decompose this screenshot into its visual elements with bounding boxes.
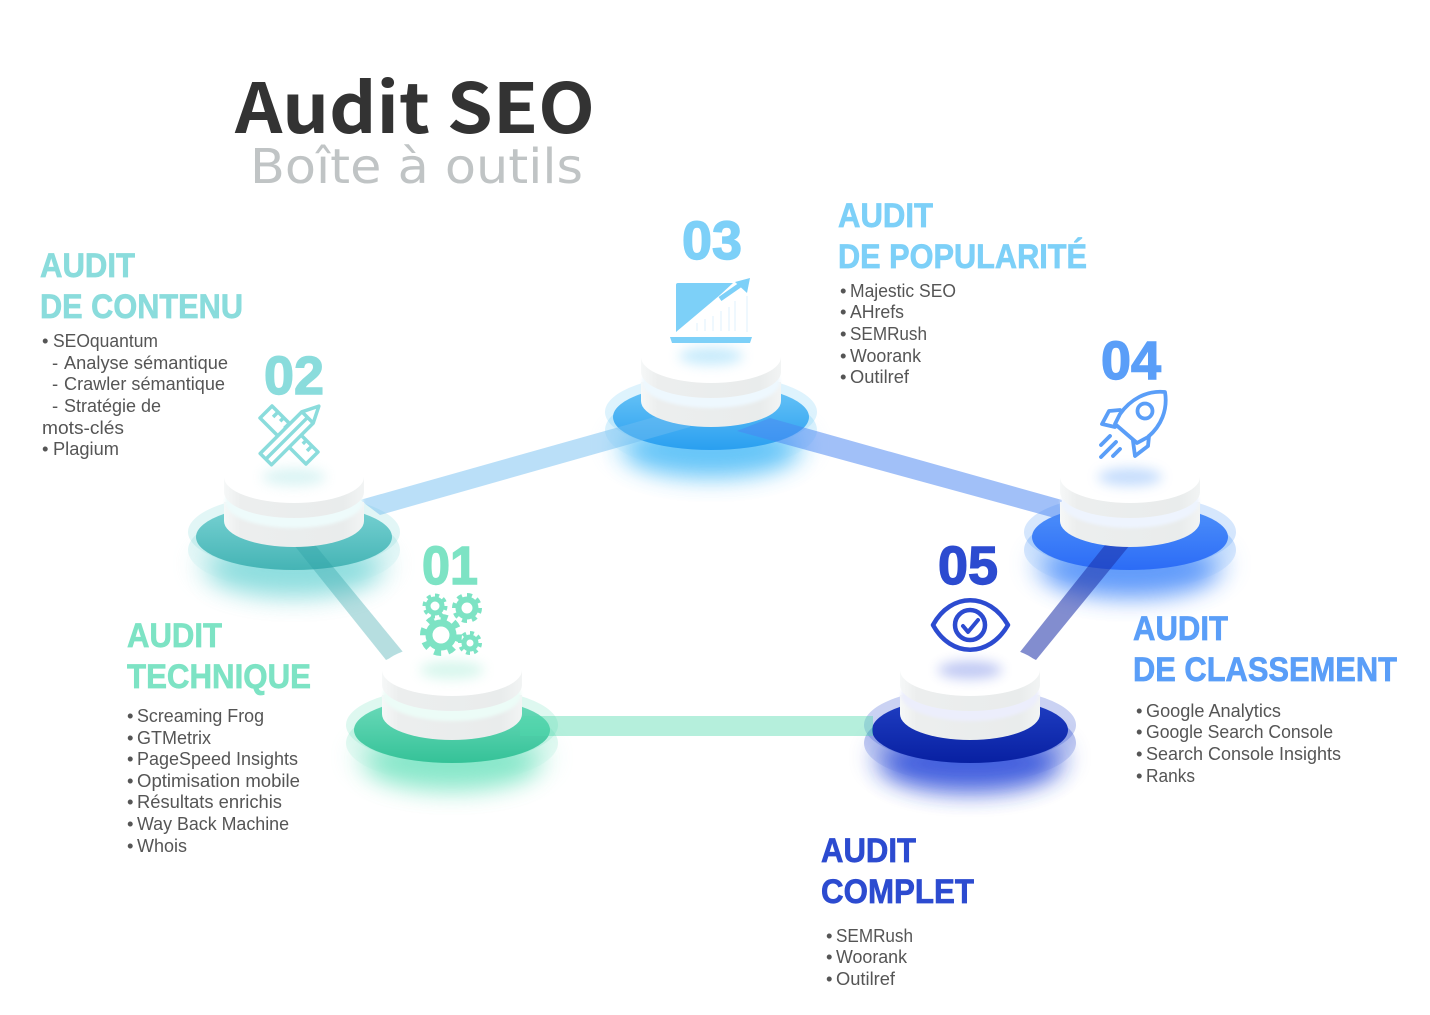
list: audit de classement: •: [1136, 700, 1142, 721]
list: audit complet: •: [826, 925, 832, 946]
list: audit technique: •: [127, 748, 133, 769]
list: audit complet: Outilref: [836, 968, 896, 989]
list: audit technique: Way Back Machine: [137, 813, 289, 834]
platform: node 04: [1060, 451, 1200, 547]
base: node 05: [864, 687, 1076, 791]
platform: node 03: [641, 331, 781, 427]
heading: audit de contenu: [40, 247, 243, 326]
list: audit technique: •: [127, 727, 133, 748]
platform: node 01: [382, 644, 522, 740]
number 03: 03: [682, 211, 742, 271]
subtitle: Boîte à outils: [250, 139, 583, 195]
heading: audit complet: COMPLET: [821, 873, 974, 911]
platform: node 05: [900, 644, 1040, 740]
list: audit technique: •: [127, 791, 133, 812]
base: node 04: [1024, 494, 1236, 598]
list: audit technique: [127, 705, 300, 856]
connector: 02 to 01: [290, 540, 403, 660]
heading: audit de classement: DE CLASSEMENT: [1133, 651, 1397, 689]
icon: laptop chart: [670, 278, 752, 343]
list: audit de contenu: •: [42, 330, 48, 351]
list: audit de popularité: •: [840, 301, 846, 322]
list: audit technique: •: [127, 835, 133, 856]
list: audit de contenu: •: [42, 438, 48, 459]
list: audit de popularité: •: [840, 366, 846, 387]
list: audit de contenu: -: [52, 395, 58, 416]
list: audit de contenu: SEOquantum: [53, 330, 158, 351]
list: audit de popularité: •: [840, 280, 846, 301]
list: audit de contenu: mots-clés: [42, 417, 124, 438]
platform: node 02: [224, 451, 364, 547]
heading: audit de classement: [1133, 610, 1397, 689]
number 05: 05: [938, 536, 998, 596]
list: audit de contenu: -: [52, 373, 58, 394]
list: audit de contenu: Crawler sémantique: [64, 373, 225, 394]
icon: gears: [423, 595, 480, 653]
icon: rocket: [1101, 392, 1166, 457]
heading: audit de classement: AUDIT: [1133, 610, 1228, 648]
list: audit complet: Woorank: [836, 946, 908, 967]
list: audit de popularité: AHrefs: [850, 301, 904, 322]
list: audit de contenu: -: [52, 352, 58, 373]
list: audit de classement: Ranks: [1146, 765, 1195, 786]
list: audit technique: •: [127, 705, 133, 726]
list: audit complet: [826, 925, 913, 989]
connector: 03 to 04: [737, 418, 1062, 520]
list: audit de classement: [1136, 700, 1341, 786]
list: audit de classement: Google Analytics: [1146, 700, 1281, 721]
list: audit de popularité: [840, 280, 956, 387]
list: audit de classement: Search Console Insights: [1146, 743, 1341, 764]
list: audit technique: •: [127, 813, 133, 834]
icon: eye: [933, 600, 1008, 650]
list: audit technique: Screaming Frog: [137, 705, 264, 726]
number 04: 04: [1101, 331, 1161, 391]
list: audit de popularité: •: [840, 323, 846, 344]
panel: audit de contenu: [40, 247, 243, 459]
heading: audit de popularité: DE POPULARITÉ: [838, 238, 1087, 276]
list: audit technique: GTMetrix: [137, 727, 212, 748]
list: audit complet: SEMRush: [836, 925, 913, 946]
heading: audit de contenu: AUDIT: [40, 247, 135, 285]
list: audit de classement: •: [1136, 721, 1142, 742]
list: audit technique: Optimisation mobile: [137, 770, 300, 791]
list: audit de popularité: Woorank: [850, 345, 922, 366]
list: audit complet: •: [826, 968, 832, 989]
heading: audit technique: [127, 617, 311, 696]
list: audit de classement: Google Search Console: [1146, 721, 1333, 742]
panel: audit de popularité: [838, 197, 1087, 387]
list: audit de classement: •: [1136, 765, 1142, 786]
connector: 01 to 05: [520, 716, 873, 736]
panel: audit de classement: [1133, 610, 1397, 786]
base: node 02: [188, 494, 400, 598]
heading: audit de popularité: [838, 197, 1087, 276]
heading: audit de contenu: DE CONTENU: [40, 288, 243, 326]
number 01: 01: [422, 536, 478, 596]
base: node 03: [605, 374, 817, 478]
base: node 01: [346, 687, 558, 791]
list: audit de popularité: •: [840, 345, 846, 366]
heading: audit technique: TECHNIQUE: [127, 658, 311, 696]
panel: audit technique: [127, 617, 311, 856]
list: audit technique: Whois: [137, 835, 187, 856]
panel: audit complet: [821, 832, 974, 989]
connector: 04 to 05: [1020, 540, 1134, 660]
heading: audit complet: [821, 832, 974, 911]
list: audit de contenu: Stratégie de: [64, 395, 161, 416]
number 02: 02: [264, 346, 324, 406]
list: audit technique: •: [127, 770, 133, 791]
list: audit technique: PageSpeed Insights: [137, 748, 298, 769]
list: audit de popularité: SEMRush: [850, 323, 927, 344]
heading: audit technique: AUDIT: [127, 617, 222, 655]
list: audit de contenu: Analyse sémantique: [64, 352, 228, 373]
connector: 02 to 03: [360, 407, 690, 515]
list: audit de contenu: [42, 330, 228, 459]
list: audit technique: Résultats enrichis: [137, 791, 282, 812]
list: audit de contenu: Plagium: [53, 438, 119, 459]
list: audit complet: •: [826, 946, 832, 967]
list: audit de classement: •: [1136, 743, 1142, 764]
list: audit de popularité: Majestic SEO: [850, 280, 956, 301]
icon: ruler and pencil: [260, 400, 325, 465]
title: Audit SEO: [234, 53, 595, 153]
heading: audit complet: AUDIT: [821, 832, 916, 870]
list: audit de popularité: Outilref: [850, 366, 910, 387]
heading: audit de popularité: AUDIT: [838, 197, 933, 235]
